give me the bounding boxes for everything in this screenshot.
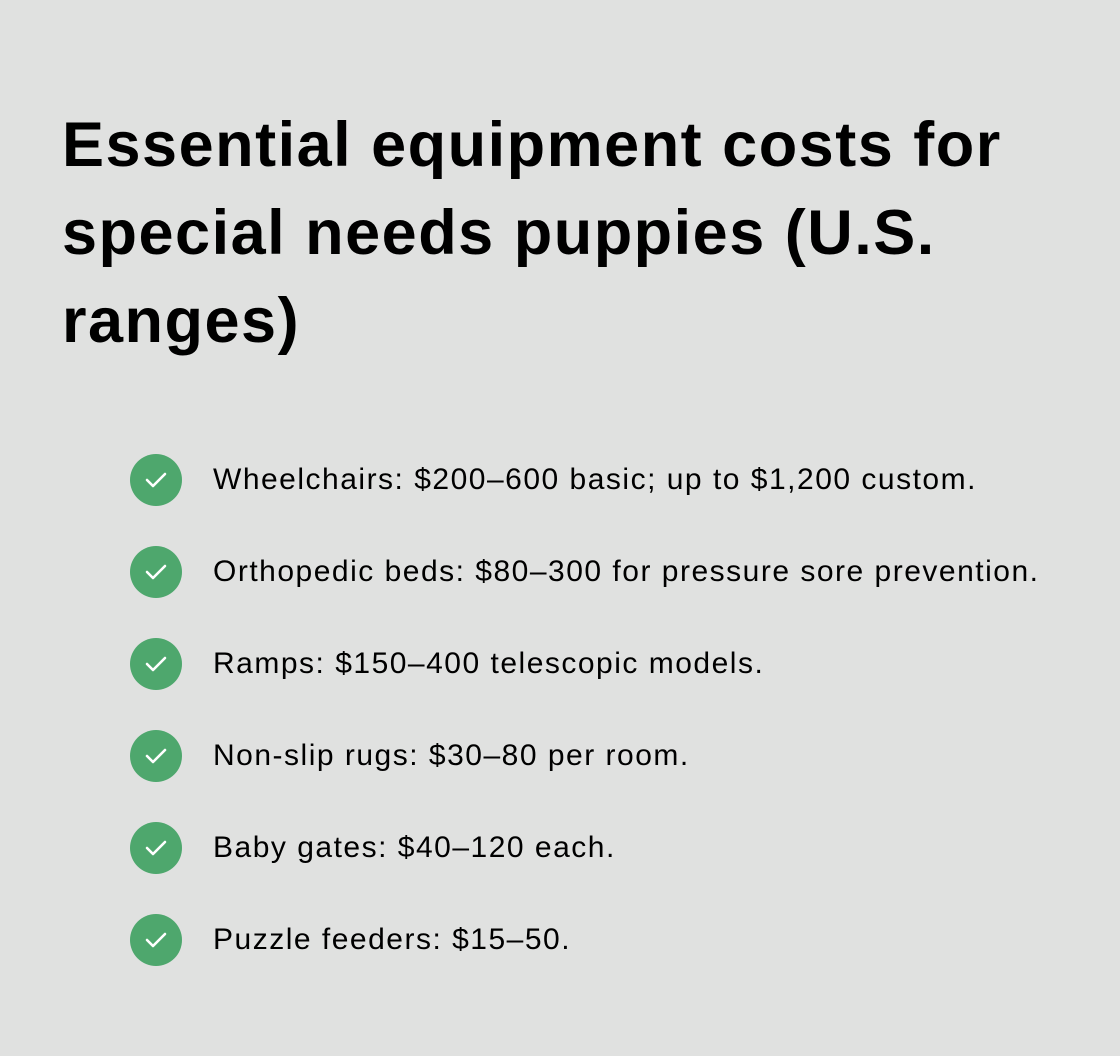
list item: puzzle feeders: Puzzle feeders: $15–50. [213,923,571,956]
list item: ramps [130,638,764,690]
list item: rugs [130,730,690,782]
list item: puzzle feeders [130,914,571,966]
list item: baby gates [130,822,616,874]
title: Essential equipment costs for special needs puppies (U.S. ranges) [62,110,1002,356]
list item: wheelchairs [130,454,977,506]
list item: wheelchairs: Wheelchairs: $200–600 basic; up to $1,200 custom. [213,463,977,496]
list item: rugs: Non-slip rugs: $30–80 per room. [213,739,690,772]
list item: ramps: Ramps: $150–400 telescopic models. [213,647,764,680]
list item: orthopedic beds: Orthopedic beds: $80–300 for pressure sore prevention. [213,555,1039,588]
list item: orthopedic beds [130,546,1039,598]
list item: baby gates: Baby gates: $40–120 each. [213,831,616,864]
